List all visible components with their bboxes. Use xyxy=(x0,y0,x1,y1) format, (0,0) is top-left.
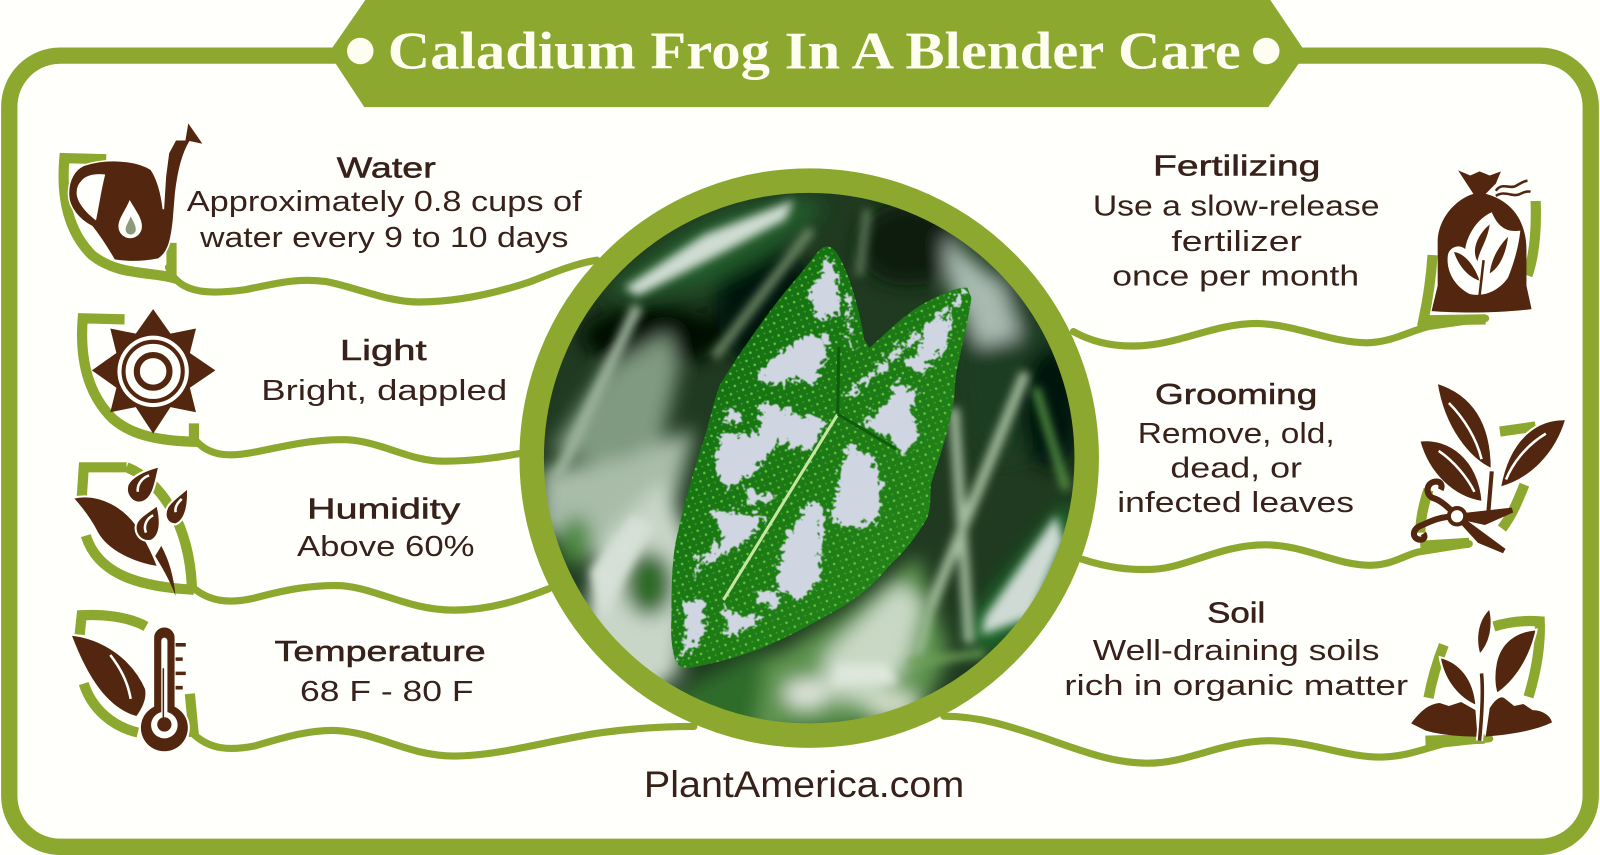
text: humidity xyxy=(297,493,475,563)
title: Caladium Frog In A Blender Care xyxy=(388,22,1241,80)
banner shape xyxy=(329,0,1306,107)
heading: Light xyxy=(340,335,427,367)
text: water xyxy=(187,153,582,254)
leaf outline: temperature xyxy=(80,615,194,737)
text: grooming: infected leaves xyxy=(1117,487,1354,519)
row: fertilizing xyxy=(1093,150,1536,320)
leaf outline: humidity xyxy=(82,467,194,590)
row: water xyxy=(64,121,582,278)
central plant photo xyxy=(531,181,1092,736)
heading: Temperature xyxy=(275,636,486,668)
leaf outline: soil xyxy=(1425,621,1540,741)
connector: soil xyxy=(944,716,1490,763)
leaf outline: water xyxy=(64,158,172,278)
leaf midrib xyxy=(723,414,838,600)
row: temperature xyxy=(70,615,486,752)
connector: light xyxy=(194,439,522,461)
heading: Soil xyxy=(1207,597,1265,629)
text: soil xyxy=(1064,597,1409,702)
row: light xyxy=(82,309,507,442)
white leaf patches xyxy=(671,252,960,657)
body: Remove, old, xyxy=(1138,418,1335,450)
main caladium leaf xyxy=(663,240,980,673)
photo ring xyxy=(532,181,1087,736)
blurred photo background xyxy=(531,184,1092,735)
heading: Grooming xyxy=(1155,379,1317,411)
connector: humidity xyxy=(192,586,549,610)
body: Approximately 0.8 cups of xyxy=(187,186,582,218)
heading: Fertilizing xyxy=(1153,150,1320,182)
heading: Water xyxy=(337,153,436,185)
text: grooming xyxy=(1117,379,1354,519)
leaf outline: fertilizing xyxy=(1423,201,1536,320)
row: grooming xyxy=(1117,379,1566,551)
icon: sun xyxy=(92,309,215,434)
icon: fertilizer bag xyxy=(1432,170,1532,313)
connector: grooming xyxy=(1082,544,1469,570)
row: soil xyxy=(1064,597,1552,741)
text: grooming: dead, or xyxy=(1170,452,1303,484)
icon: leaf and drops xyxy=(73,466,188,596)
heading: Humidity xyxy=(307,493,461,525)
text: fertilizing: fertilizer xyxy=(1171,226,1303,258)
title bullet left xyxy=(347,38,374,64)
text: fertilizing: once per month xyxy=(1112,261,1359,293)
title bullet right xyxy=(1253,38,1280,64)
connector: water xyxy=(168,260,597,302)
text: light xyxy=(261,335,507,407)
body: 68 F - 80 F xyxy=(300,676,474,708)
body: Bright, dappled xyxy=(261,375,507,407)
icon: plant in soil xyxy=(1411,608,1552,741)
connector: temperature xyxy=(192,726,694,756)
title banner xyxy=(329,0,1306,107)
website credit: PlantAmerica.com xyxy=(644,764,964,805)
icon: leaf and thermometer xyxy=(70,626,189,752)
leaf outline: light xyxy=(82,318,194,442)
leaf outline: grooming xyxy=(1420,426,1536,546)
connector: fertilizing xyxy=(1073,318,1486,346)
text: soil: rich in organic matter xyxy=(1064,670,1409,702)
text: temperature xyxy=(275,636,486,708)
icon: watering can xyxy=(68,121,204,262)
text: water: water every 9 to 10 days xyxy=(199,222,568,254)
body: Well-draining soils xyxy=(1093,635,1380,667)
body: Use a slow-release xyxy=(1093,190,1380,222)
body: Above 60% xyxy=(297,531,475,563)
icon: leaves and shears xyxy=(1414,383,1566,551)
text: fertilizing xyxy=(1093,150,1380,293)
row: humidity xyxy=(73,466,475,596)
